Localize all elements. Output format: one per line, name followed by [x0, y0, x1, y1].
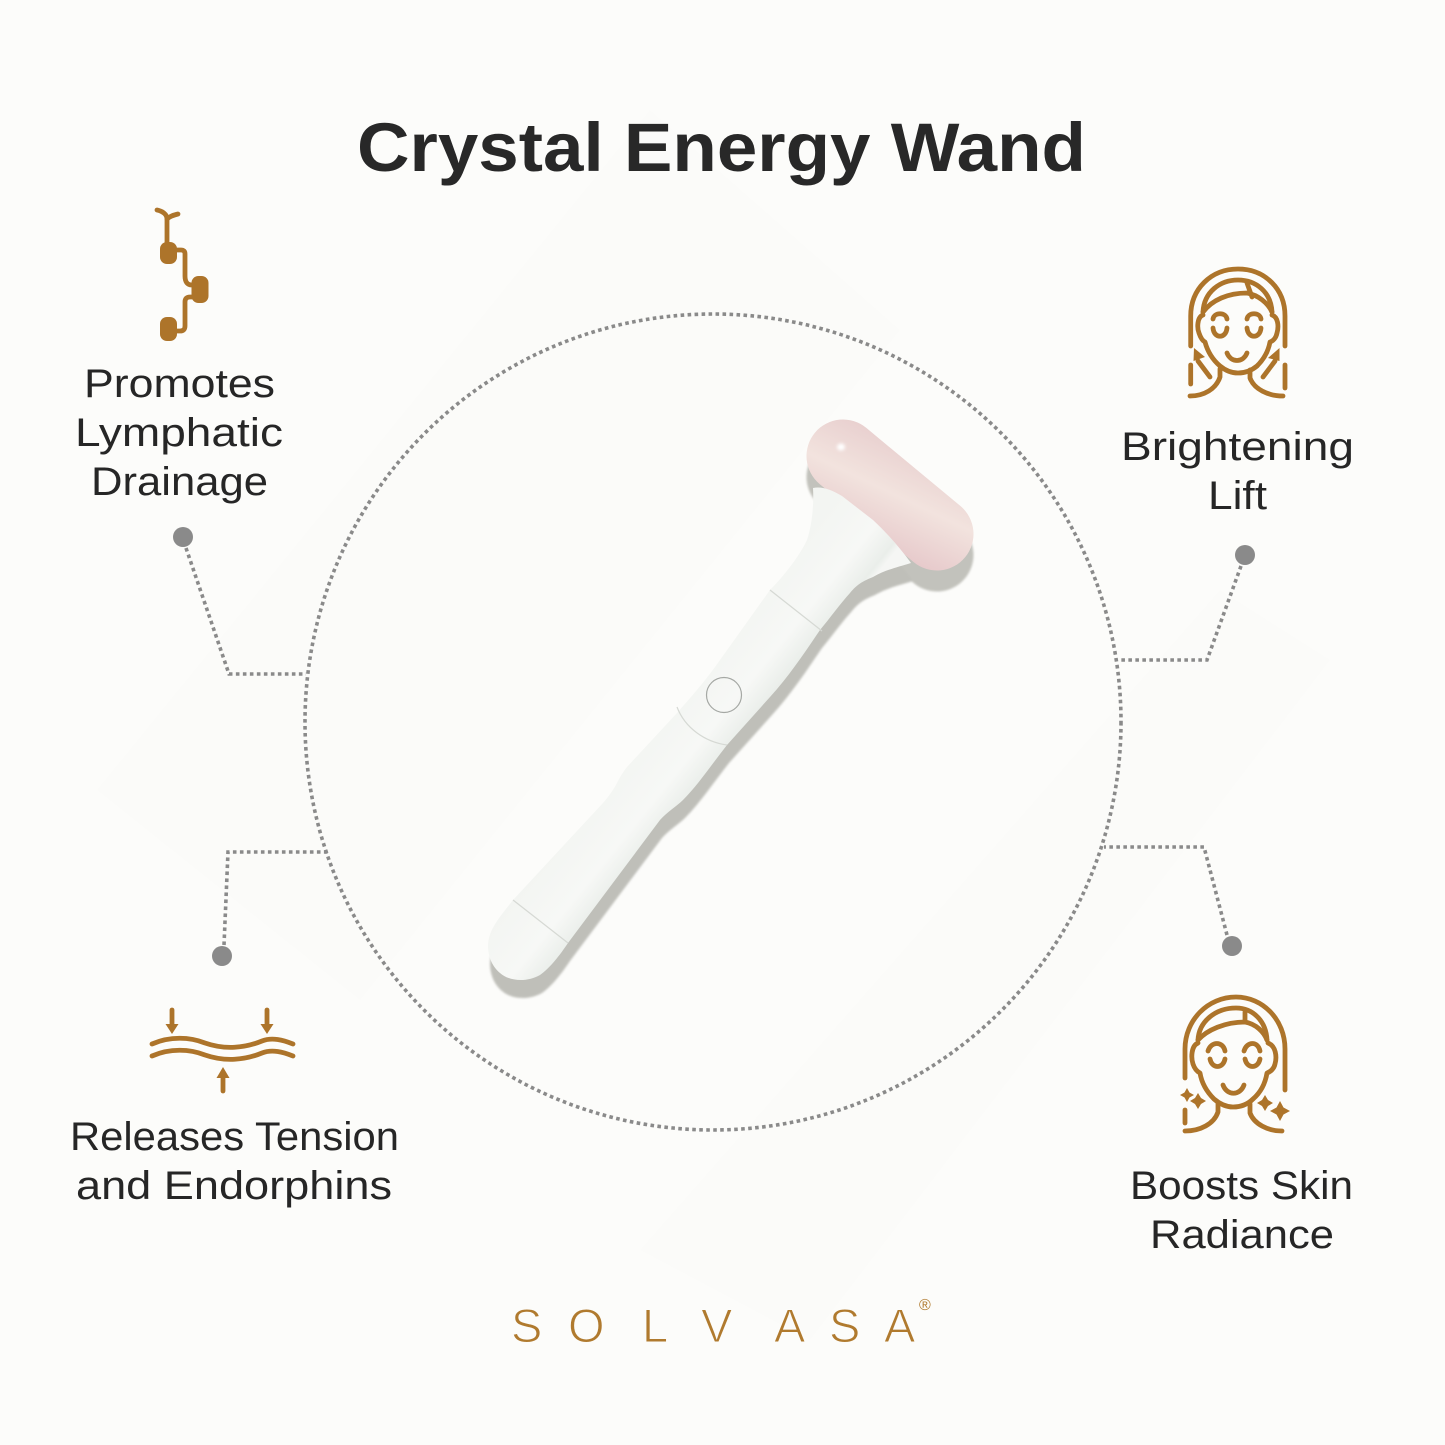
- callout: promotes lymphatic drainage: [75, 210, 306, 674]
- icon: face with lift arrows: [1190, 269, 1285, 396]
- label: Lymphatic: [75, 411, 283, 455]
- callout: releases tension and endorphins: [70, 852, 399, 1208]
- connector: [1104, 847, 1242, 956]
- handle seams and power button: [513, 590, 822, 943]
- product: crystal energy wand: [488, 444, 937, 998]
- label: Releases Tension: [70, 1115, 399, 1159]
- brand logo: L: [642, 1299, 668, 1352]
- dotted circle around product: [305, 314, 1121, 1130]
- label: Drainage: [91, 460, 268, 504]
- label: Radiance: [1150, 1213, 1334, 1257]
- label: and Endorphins: [76, 1164, 392, 1208]
- brand logo: O: [568, 1299, 605, 1352]
- title: Crystal Energy Wand: [357, 109, 1086, 186]
- label: [70, 1115, 399, 1208]
- icon: face with sparkles: [1180, 997, 1290, 1131]
- callout: brightening lift: [1119, 269, 1354, 660]
- brand logo: S: [829, 1299, 860, 1352]
- brand logo: A: [774, 1299, 806, 1352]
- connector: [173, 527, 306, 674]
- rose quartz roller: [843, 456, 937, 534]
- wand shadow: [490, 477, 937, 998]
- brand logo: S: [511, 1299, 542, 1352]
- brand logo: ®: [919, 1297, 931, 1314]
- label: [75, 362, 283, 504]
- brand logo: V: [701, 1299, 733, 1352]
- label: [1121, 425, 1354, 518]
- connector: [212, 852, 329, 966]
- callout: boosts skin radiance: [1104, 847, 1353, 1257]
- label: Brightening: [1121, 425, 1354, 469]
- wand handle: [488, 487, 911, 980]
- brand logo: A: [884, 1299, 916, 1352]
- label: Lift: [1208, 474, 1267, 518]
- brand logo: [511, 1297, 931, 1352]
- label: Promotes: [84, 362, 275, 406]
- connector: [1119, 545, 1255, 660]
- icon: lymph nodes: [157, 210, 208, 341]
- icon: tissue with pressure arrows: [152, 1010, 293, 1091]
- label: Boosts Skin: [1130, 1164, 1353, 1208]
- label: [1130, 1164, 1353, 1257]
